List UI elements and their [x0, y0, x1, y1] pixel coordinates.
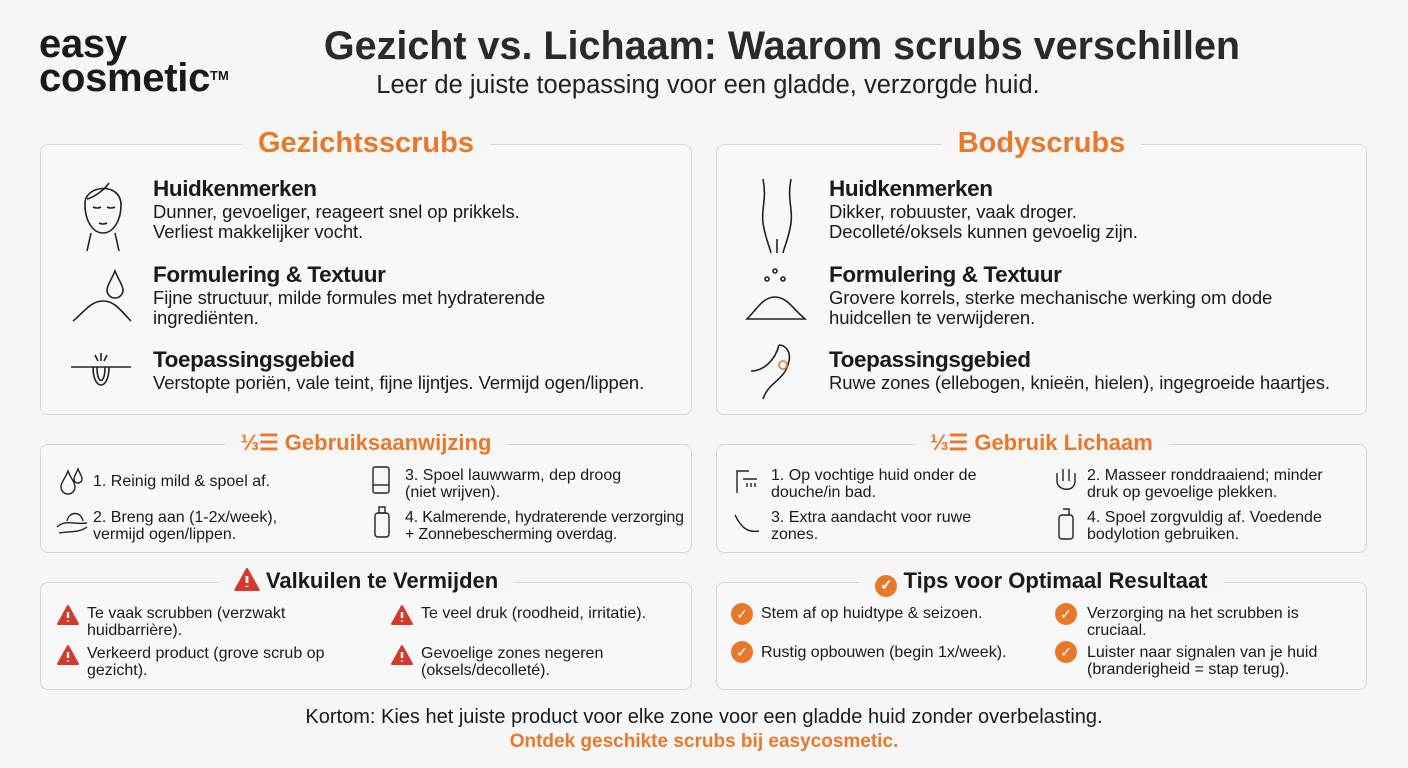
icon: drops — [60, 467, 83, 495]
heading: Tips voor Optimaal Resultaat: ✓ — [880, 577, 893, 594]
step 3: 3. Spoel lauwwarm, dep droog — [405, 467, 621, 484]
item 2 — [57, 645, 79, 665]
logo — [39, 22, 229, 100]
step 4: 4. Kalmerende, hydraterende verzorging — [405, 509, 684, 526]
heading: Tips voor Optimaal Resultaat: Tips voor Optimaal Resultaat — [904, 568, 1208, 593]
heading: Gebruiksaanwijzing: ⅓☰ Gebruiksaanwijzing — [241, 430, 491, 455]
panel: Tips — [716, 582, 1367, 690]
text: Huidkenmerken — [153, 176, 520, 242]
subtitle: Leer de juiste toepassing voor een gladde, verzorgde huid. — [376, 71, 1040, 99]
tip 1: ✓ — [736, 606, 748, 622]
panel: Valkuilen — [40, 582, 692, 690]
tip 2: ✓ — [736, 644, 748, 660]
step 1: douche/in bad. — [771, 484, 876, 501]
footer call to action: Ontdek geschikte scrubs bij easycosmetic. — [510, 731, 898, 752]
text: Formulering & Textuur — [829, 262, 1272, 328]
step 3 — [405, 467, 621, 501]
text: Formulering & Textuur: Fijne structuur, milde formules met hydraterende — [153, 287, 545, 308]
panel: Tips: Stem af op huidtype & seizoen. — [761, 605, 982, 622]
panel: Valkuilen: (oksels/decolleté). — [421, 662, 550, 679]
panel: Tips: cruciaal. — [1087, 622, 1147, 639]
panel: Gebruiksaanwijzing — [40, 444, 692, 553]
panel: Valkuilen: Verkeerd product (grove scrub op — [87, 645, 324, 662]
text: Toepassingsgebied: Toepassingsgebied — [153, 347, 355, 372]
text: Huidkenmerken: Dunner, gevoeliger, reageert snel op prikkels. — [153, 201, 520, 222]
panel: Tips: (branderigheid = stap terug). — [1087, 661, 1289, 678]
item 1 — [57, 605, 79, 625]
step 1: 1. Reinig mild & spoel af. — [93, 473, 270, 490]
text: Huidkenmerken — [829, 176, 1138, 242]
step 3: 3. Extra aandacht voor ruwe — [771, 509, 971, 526]
heading: Gezichtsscrubs: Gezichtsscrubs — [258, 127, 474, 159]
panel: Valkuilen: gezicht). — [87, 662, 147, 679]
panel: Tips: Rustig opbouwen (begin 1x/week). — [761, 644, 1006, 661]
step 2: vermijd ogen/lippen. — [93, 526, 236, 543]
tip 4: ✓ — [1060, 644, 1072, 660]
icon: knee — [751, 344, 790, 400]
step 2 — [1087, 467, 1323, 501]
icon: pore — [71, 353, 131, 386]
tip 4 — [1055, 641, 1077, 663]
icon: body — [762, 178, 792, 254]
text: Formulering & Textuur: Formulering & Textuur — [829, 262, 1061, 287]
logo: easy — [39, 22, 127, 66]
text: Toepassingsgebied — [153, 347, 644, 393]
step 2: druk op gevoelige plekken. — [1087, 484, 1277, 501]
panel: Bodyscrubs — [716, 144, 1367, 415]
step 4: bodylotion gebruiken. — [1087, 526, 1239, 543]
panel: Gezichtsscrubs — [40, 144, 692, 415]
step 1: 1. Op vochtige huid onder de — [771, 467, 976, 484]
step 4 — [405, 509, 684, 543]
heading: Gebruik Lichaam: ⅓☰ Gebruik Lichaam — [930, 430, 1153, 455]
text: Toepassingsgebied: Toepassingsgebied — [829, 347, 1031, 372]
panel: Valkuilen: huidbarrière). — [87, 622, 182, 639]
text: Formulering & Textuur: huidcellen te verwijderen. — [829, 307, 1035, 328]
icon: drop and powder — [72, 269, 132, 322]
panel: Tips: Verzorging na het scrubben is — [1087, 605, 1299, 622]
step 4 — [1087, 509, 1322, 543]
step 1 — [771, 467, 976, 501]
step 2: 2. Breng aan (1-2x/week), — [93, 509, 277, 526]
panel: Valkuilen: Te vaak scrubben (verzwakt — [87, 605, 285, 622]
text: Toepassingsgebied — [829, 347, 1330, 393]
text: Formulering & Textuur: Formulering & Textuur — [153, 262, 385, 287]
step 3: (niet wrijven). — [405, 484, 500, 501]
panel: Gebruik Lichaam — [716, 444, 1367, 553]
text: Toepassingsgebied: Ruwe zones (ellebogen, knieën, hielen), ingegroeide haartjes. — [829, 372, 1330, 393]
step 3: zones. — [771, 526, 818, 543]
panel: Valkuilen: Gevoelige zones negeren — [421, 645, 603, 662]
footer summary: Kortom: Kies het juiste product voor elke zone voor een gladde huid zonder overbelasting. — [305, 706, 1103, 728]
panel: Valkuilen: Te veel druk (roodheid, irritatie). — [421, 605, 646, 622]
icon: coarse granules — [745, 268, 808, 320]
tip 2 — [731, 641, 753, 663]
text: Huidkenmerken: Dikker, robuuster, vaak droger. — [829, 201, 1077, 222]
logo: cosmeticTM — [39, 56, 229, 100]
step 2 — [93, 509, 277, 543]
text: Formulering & Textuur: Grovere korrels, sterke mechanische werking om dode — [829, 287, 1272, 308]
text: Huidkenmerken: Huidkenmerken — [829, 176, 993, 201]
tip 1 — [731, 603, 753, 625]
text: Formulering & Textuur: ingrediënten. — [153, 307, 259, 328]
title: Gezicht vs. Lichaam: Waarom scrubs verschillen — [324, 24, 1240, 68]
icon: face — [84, 182, 122, 252]
item 4 — [391, 645, 413, 665]
text: Formulering & Textuur — [153, 262, 545, 328]
heading: Bodyscrubs: Bodyscrubs — [958, 127, 1125, 159]
item 3 — [391, 605, 413, 625]
heading: Valkuilen te Vermijden: Valkuilen te Vermijden — [266, 568, 498, 593]
panel: Tips: Luister naar signalen van je huid — [1087, 644, 1317, 661]
step 4: + Zonnebescherming overdag. — [405, 526, 617, 543]
tip 3 — [1055, 603, 1077, 625]
text: Huidkenmerken: Verliest makkelijker vocht. — [153, 221, 363, 242]
step 4: 4. Spoel zorgvuldig af. Voedende — [1087, 509, 1322, 526]
text: Huidkenmerken: Decolleté/oksels kunnen gevoelig zijn. — [829, 221, 1138, 242]
step 2: 2. Masseer ronddraaiend; minder — [1087, 467, 1323, 484]
tip 3: ✓ — [1060, 606, 1072, 622]
step 3 — [771, 509, 971, 543]
text: Toepassingsgebied: Verstopte poriën, vale teint, fijne lijntjes. Vermijd ogen/lippen. — [153, 372, 644, 393]
text: Huidkenmerken: Huidkenmerken — [153, 176, 317, 201]
